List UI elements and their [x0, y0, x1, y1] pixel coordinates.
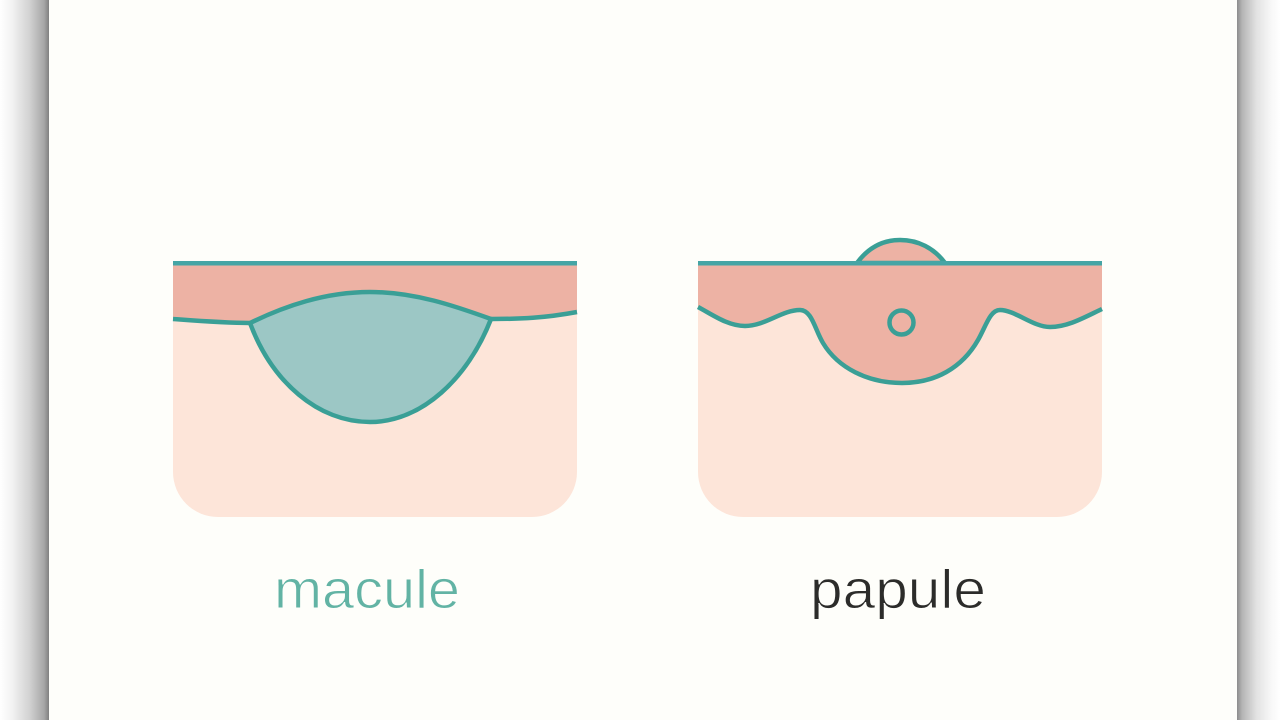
epidermis boundary line	[173, 312, 577, 323]
epidermis layer with bulge	[698, 263, 1102, 383]
small follicle circle	[890, 310, 914, 334]
panel: macule skin diagram	[173, 261, 577, 517]
epidermis layer	[173, 263, 577, 323]
panel: papule skin diagram	[698, 240, 1102, 517]
label: macule: macule	[274, 559, 460, 621]
macule lesion	[250, 292, 491, 422]
epidermis boundary line	[698, 307, 1102, 383]
raised bump	[857, 240, 945, 263]
dermis layer	[698, 263, 1102, 517]
label: papule: papule	[810, 559, 986, 621]
dermis layer	[173, 263, 577, 517]
skin surface line	[173, 261, 577, 266]
skin surface line	[698, 261, 1102, 266]
